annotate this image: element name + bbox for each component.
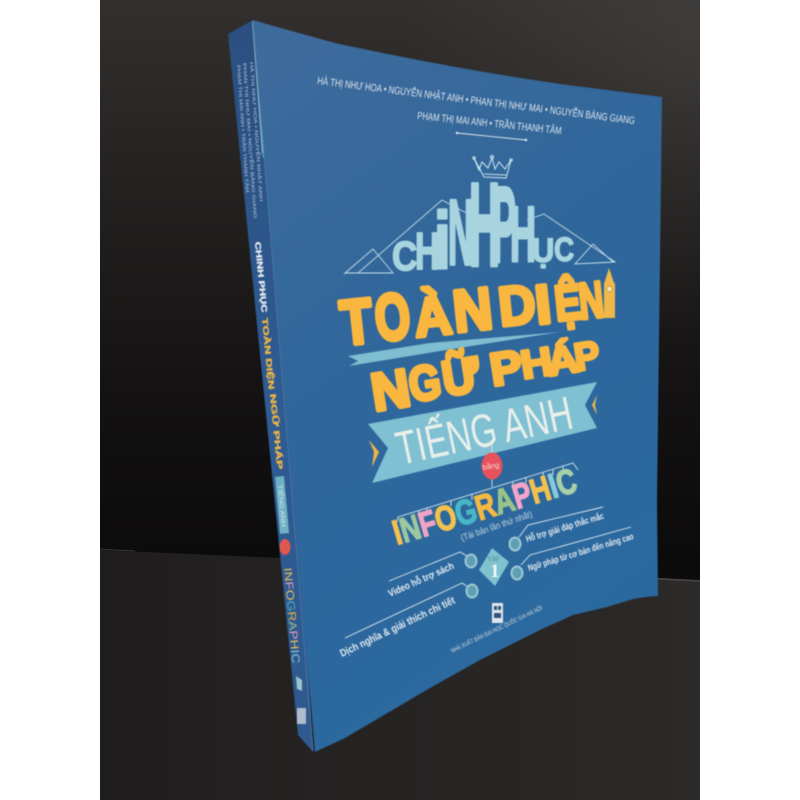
spine ribbon (275, 476, 289, 534)
feature: hotline support: Hỗ trợ giải đáp thắc mắc (524, 510, 605, 544)
heading: toan dien: N (576, 272, 606, 331)
GGBOOK cover strip highlight (253, 21, 313, 751)
book (228, 20, 662, 752)
spine title: CHINH PHỤC (253, 241, 269, 313)
heading: ngu phap (367, 333, 603, 423)
spine publisher tab (252, 21, 281, 158)
heading: chinh phuc: P (492, 165, 516, 284)
spine title: NGỮ PHÁP (268, 393, 284, 471)
badge: bang (482, 452, 502, 480)
heading: toan dien: T (337, 286, 376, 359)
heading: chinh phuc: N (448, 181, 473, 284)
spine authors: PHẠM THỊ MAI ANH • TRẦN THANH TÂM (236, 65, 251, 193)
icon: mountains (344, 200, 615, 274)
feature lines (345, 507, 631, 638)
photo background (100, 0, 700, 800)
heading: toan dien: N (450, 275, 495, 344)
heading: chinh phuc: H (469, 159, 500, 290)
spine title (253, 241, 284, 471)
spine authors (236, 62, 265, 219)
icon: crown (473, 156, 512, 178)
spine title: TOÀN DIỆN (260, 317, 276, 390)
icon: big ben (604, 268, 615, 318)
heading: chinh phuc: Ụ (532, 232, 554, 269)
spine publisher tab: GGBOOK (259, 59, 281, 137)
author divider (456, 132, 527, 141)
feature: translation: Dịch nghĩa & giải thích chi tiết (338, 594, 457, 660)
badge: volume 1 (479, 548, 509, 586)
feature: grammar levels: Ngữ pháp từ cơ bản đến nâng cao (527, 531, 635, 573)
heading: ngu phap: Ữ (438, 346, 484, 406)
heading: chinh phuc (392, 159, 574, 290)
heading: toan dien: À (411, 284, 455, 349)
badge: volume 1: Tập (487, 555, 500, 564)
feature: video: Video hỗ trợ sách (386, 559, 456, 600)
heading: infographic: INFOGRAPHIC (388, 461, 581, 553)
feature dots (466, 538, 522, 598)
heading: toan dien (337, 272, 606, 359)
arrow: ribbon left (369, 440, 379, 467)
spine ribbon: TIẾNG ANH (276, 485, 287, 527)
heading: ngu phap: N (367, 359, 414, 423)
heading: toan dien: Ệ (552, 273, 584, 332)
heading: ngu phap: G (405, 353, 445, 413)
authors: PHẠM THỊ MAI ANH • TRẦN THANH TÂM (417, 109, 562, 137)
front cover (253, 20, 662, 752)
spine authors: HÀ THỊ NHƯ HOA • NGUYỄN NHẬT ANH (249, 62, 265, 202)
heading: chinh phuc: C (554, 230, 574, 269)
connector lines for infographic (397, 445, 578, 522)
arrow: ribbon right (592, 395, 597, 415)
badge: bang: bằng (482, 460, 500, 472)
heading: toan dien: O (371, 278, 414, 355)
heading: toan dien: D (496, 274, 539, 338)
heading: ngu phap: H (517, 338, 556, 387)
heading: chinh phuc: H (415, 223, 440, 281)
spine publisher logo (297, 708, 306, 724)
edition note: (Tái bản lần thứ nhất) (459, 509, 534, 543)
spine infographic: IN F O G R A P H IC (281, 567, 301, 664)
icon: publisher logo (492, 603, 503, 623)
badge: volume 1: 1 (490, 561, 500, 582)
spine red circle (280, 539, 290, 555)
heading: chinh phuc: H (510, 190, 536, 278)
ribbon: tieng anh (368, 382, 597, 483)
heading: ngu phap: P (571, 333, 603, 380)
ribbon: toan dien underline (348, 332, 560, 366)
heading: ngu phap: P (486, 339, 526, 396)
spine volume tile (296, 676, 302, 691)
publisher name: NHÀ XUẤT BẢN ĐẠI HỌC QUỐC GIA HÀ NỘI (450, 605, 544, 655)
spine authors: PHAN THỊ NHƯ MAI • NGUYỄN BÀNG GIANG (242, 63, 259, 219)
heading: chinh phuc: i (434, 196, 451, 285)
heading: ngu phap: Á (543, 336, 582, 384)
heading: toan dien: I (532, 273, 554, 336)
book spine (228, 20, 313, 752)
heading: chinh phuc: C (392, 235, 417, 280)
authors: HÀ THỊ NHƯ HOA • NGUYỄN NHẬT ANH • PHAN THỊ NHƯ MAI • NGUYỄN BÀNG GIANG (317, 74, 636, 127)
heading: tieng anh: TIẾNG ANH (391, 386, 577, 475)
